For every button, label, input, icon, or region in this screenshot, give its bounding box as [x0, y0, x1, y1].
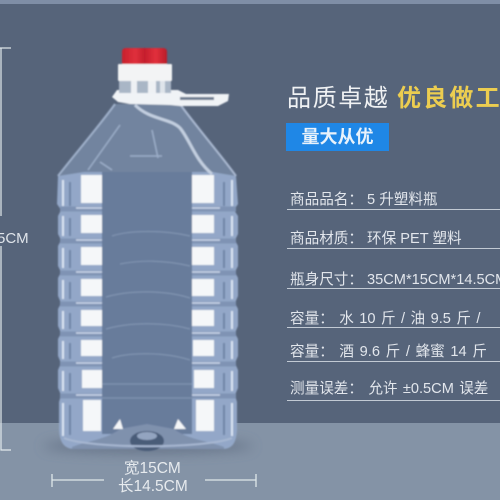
spec rows [287, 191, 500, 401]
red cap [122, 48, 167, 64]
length label: 长14.5CM [118, 478, 188, 495]
icon: height dimension bracket [0, 48, 11, 450]
top strip [0, 0, 500, 4]
spec: material: 商品材质： 环保 PET 塑料 [290, 231, 462, 247]
centre ripple highlights [102, 232, 192, 398]
bottle [57, 48, 238, 451]
spec: capacity wine honey: 容量： 酒 9.6 斤 / 蜂蜜 14 斤 [290, 344, 487, 360]
white label blocks right [192, 175, 214, 431]
heading highlight: 优良做工 [397, 85, 500, 112]
width label: 宽15CM [124, 460, 181, 477]
bottle neck [119, 80, 171, 93]
spec: product name: 商品品名： 5 升塑料瓶 [290, 192, 438, 208]
bottle base [72, 424, 224, 449]
white label blocks left [81, 175, 102, 431]
bottle shadow [43, 439, 253, 453]
side ribs [70, 182, 224, 435]
icon: width dimension [52, 474, 256, 487]
spec: capacity water oil: 容量： 水 10 斤 / 油 9.5 斤 / [290, 311, 480, 327]
heading: 品质卓越 [287, 85, 389, 112]
white collar [118, 64, 172, 81]
floor [0, 423, 500, 500]
bottle body [57, 104, 238, 449]
spec: tolerance: 测量误差： 允许 ±0.5CM 误差 [290, 381, 488, 397]
centre panel [102, 172, 192, 434]
bottle handle [112, 90, 229, 106]
badge: 量大从优 [302, 127, 374, 147]
shoulder [58, 104, 236, 176]
badge [286, 123, 389, 151]
